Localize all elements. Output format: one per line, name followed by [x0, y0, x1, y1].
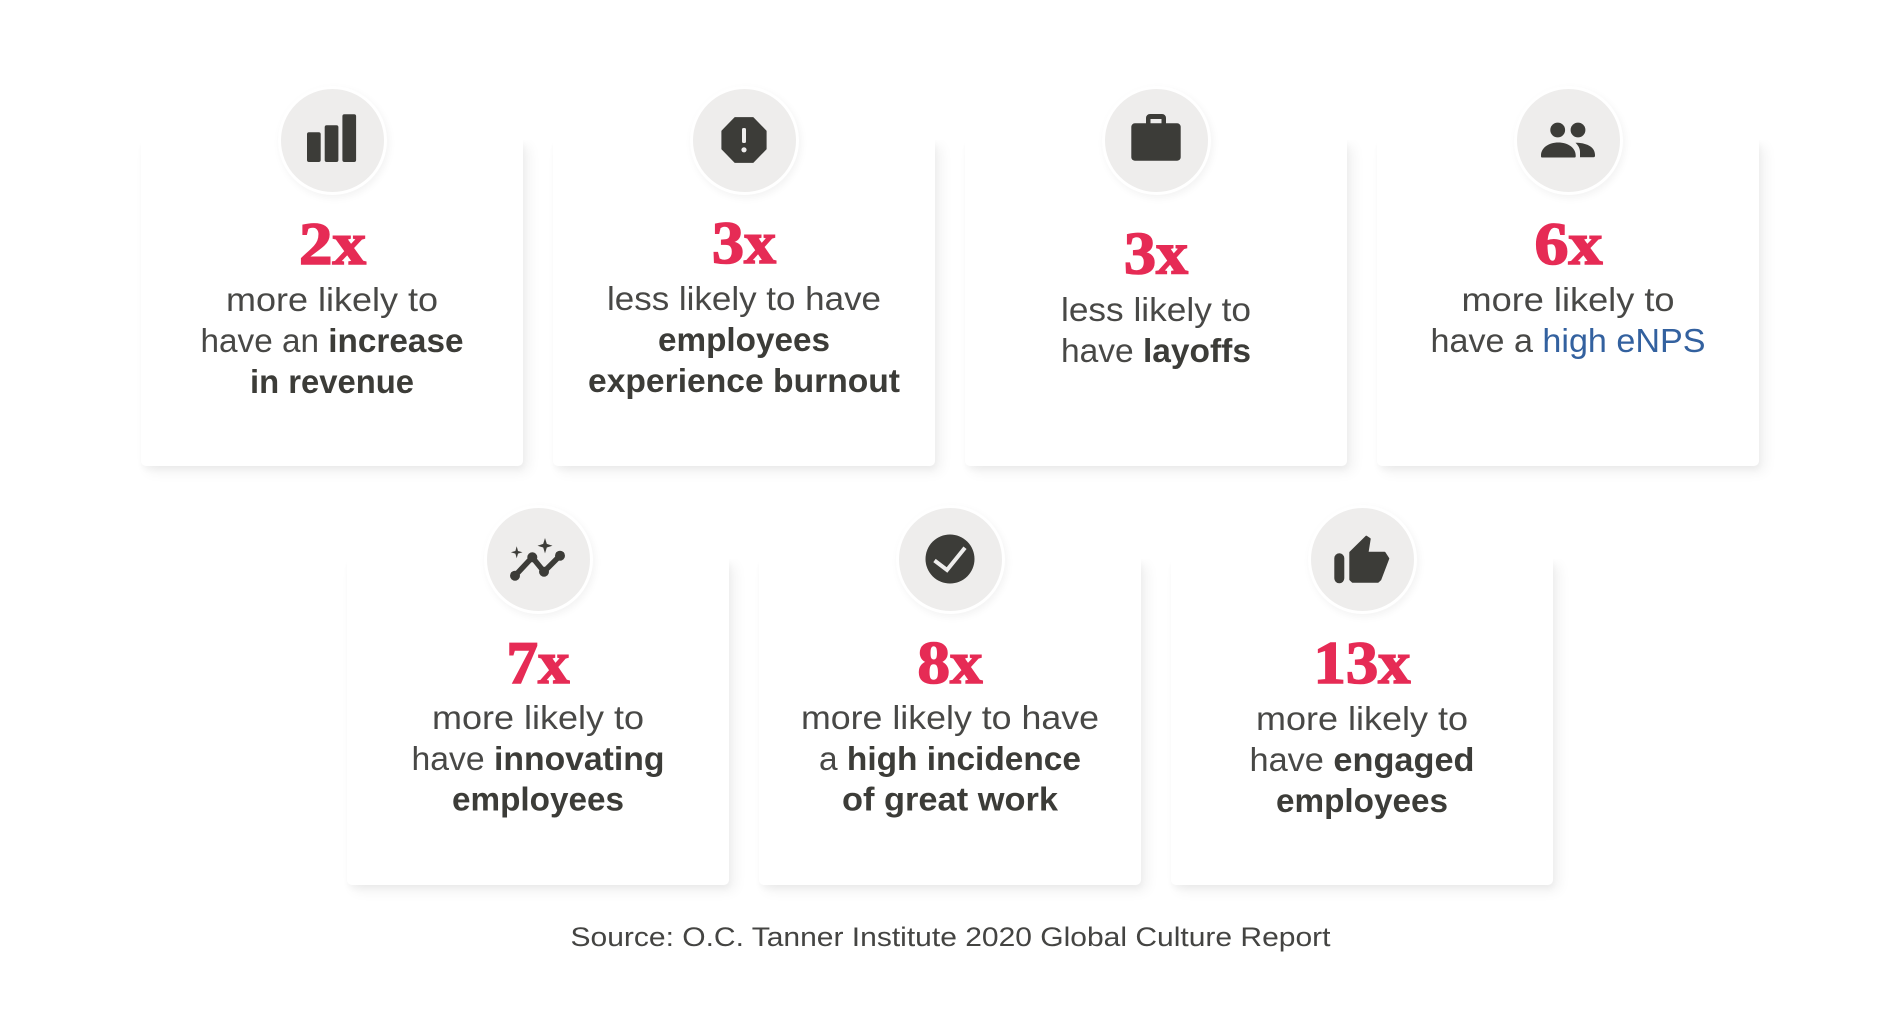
description: have layoffs	[1061, 332, 1251, 369]
description	[801, 699, 1099, 818]
card artwork and text	[588, 117, 900, 399]
card: 6x high eNPS	[1380, 89, 1764, 472]
icon: briefcase	[1131, 114, 1181, 161]
card: 2x increase in revenue	[144, 89, 528, 472]
description: have innovating	[412, 740, 664, 777]
description	[200, 281, 464, 400]
icon: sparkle trend line	[510, 538, 565, 581]
panel background	[965, 140, 1347, 466]
source note: Source: O.C. Tanner Institute 2020 Global Culture Report	[570, 922, 1331, 952]
description	[588, 280, 900, 399]
icon disc	[1308, 504, 1416, 614]
icon: people	[1541, 123, 1595, 158]
description: less likely to	[1061, 291, 1251, 328]
stat: 8x: 8x	[918, 630, 982, 696]
panel background	[141, 140, 523, 466]
icon disc	[278, 86, 386, 194]
panel background	[347, 559, 729, 885]
panel background	[553, 140, 935, 466]
description: employees	[452, 780, 624, 818]
description: employees	[1276, 782, 1448, 819]
icon disc	[896, 504, 1004, 614]
description: more likely to have	[801, 699, 1099, 736]
icon: bar chart	[307, 114, 356, 162]
icon disc	[1514, 86, 1622, 194]
description: have an increase	[200, 322, 464, 359]
icon disc	[484, 504, 592, 614]
card artwork and text	[1430, 122, 1706, 359]
panel background	[759, 559, 1141, 885]
card artwork and text	[412, 538, 664, 818]
description: more likely to	[226, 281, 438, 318]
icon: thumbs up	[1334, 537, 1388, 583]
card: 8x great work	[762, 508, 1146, 891]
card artwork and text	[1250, 536, 1474, 819]
panel background	[1171, 559, 1553, 885]
stat: 2x: 2x	[299, 211, 366, 277]
card artwork and text	[200, 114, 464, 400]
description	[412, 699, 664, 818]
stat: 3x: 3x	[1124, 220, 1188, 286]
card: 7x innovating employees	[350, 508, 734, 891]
stat: 7x: 7x	[506, 630, 570, 696]
description: of great work	[842, 780, 1059, 818]
description: in revenue	[250, 363, 414, 400]
stat: 6x: 6x	[1534, 211, 1602, 277]
icon disc	[690, 86, 798, 194]
card: 13x engaged employees	[1174, 508, 1558, 891]
card: 3x burnout	[556, 89, 940, 472]
description: more likely to	[1256, 700, 1468, 737]
description: experience burnout	[588, 362, 900, 399]
card artwork and text	[1061, 114, 1251, 369]
description: more likely to	[432, 699, 644, 736]
description: employees	[658, 321, 830, 358]
stat: 13x: 13x	[1314, 630, 1410, 696]
description	[1061, 291, 1251, 369]
stat: 3x: 3x	[712, 210, 776, 276]
icon: check circle	[926, 534, 974, 584]
description	[1250, 700, 1474, 819]
icon: warning octagon	[722, 118, 766, 162]
icon disc	[1102, 86, 1210, 194]
description: more likely to	[1462, 281, 1674, 318]
description: a high incidence	[819, 740, 1081, 777]
panel background	[1377, 140, 1759, 466]
description: have a high eNPS	[1430, 322, 1706, 359]
description	[1430, 281, 1706, 359]
description: have engaged	[1250, 741, 1474, 778]
card: 3x layoffs	[968, 89, 1352, 472]
card artwork and text	[801, 534, 1099, 818]
description: less likely to have	[607, 280, 881, 317]
